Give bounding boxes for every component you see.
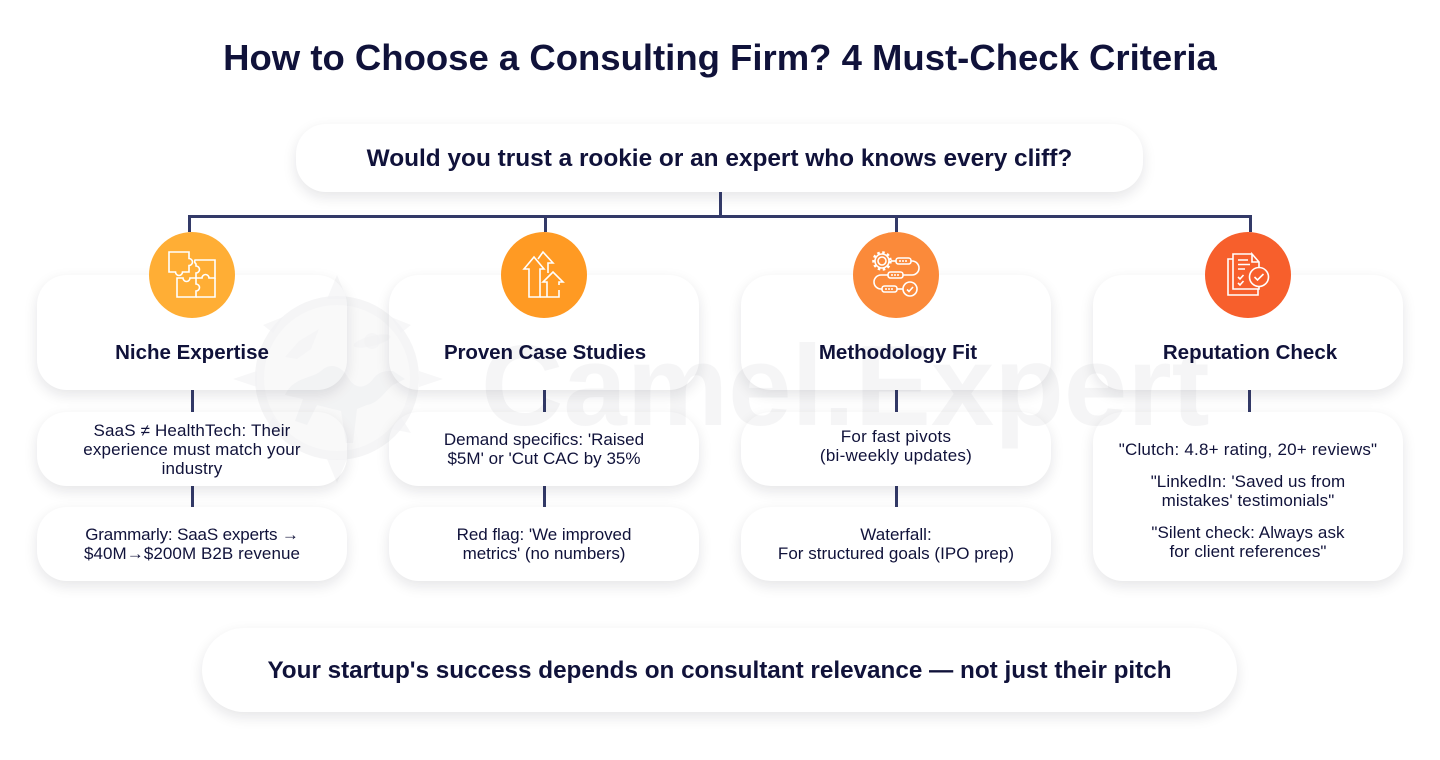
heading card: reputation check: Reputation Check xyxy=(1163,341,1337,364)
panel: reputation check xyxy=(1090,232,1406,590)
text card: industry match: SaaS ≠ HealthTech: Their xyxy=(94,420,290,440)
text card: agile: For fast pivots xyxy=(841,426,951,446)
panel: methodology fit xyxy=(738,232,1054,590)
heading card: reputation check xyxy=(1093,275,1403,390)
title: How to Choose a Consulting Firm? 4 Must-Check Criteria xyxy=(223,37,1217,78)
text card: demand specifics: Demand specifics: 'Raised xyxy=(444,430,644,449)
text card: review sources: mistakes' testimonials" "Silent check: Always ask xyxy=(1151,491,1345,542)
heading card: methodology fit: Methodology Fit xyxy=(819,341,977,364)
heading card: niche expertise: Niche Expertise xyxy=(115,341,269,364)
text card: Grammarly example: $40M→$200M B2B revenue xyxy=(84,544,300,563)
text card: Grammarly example: Grammarly: SaaS experts → xyxy=(85,525,299,544)
top question pill xyxy=(296,124,1143,192)
text card: demand specifics xyxy=(389,412,699,486)
icon: process flow xyxy=(853,232,939,318)
text card: industry match: industry xyxy=(162,458,222,478)
watermark: camel compass emblem xyxy=(255,296,419,460)
watermark: Camel.Expert wordmark: Camel.Expert xyxy=(481,323,1210,450)
text card: review sources: for client references" xyxy=(1169,542,1327,561)
heading card: proven case studies xyxy=(389,275,699,390)
icon: checklist document xyxy=(1205,232,1291,318)
connector: tree from question to four criteria xyxy=(188,192,1252,232)
heading card: niche expertise xyxy=(37,275,347,390)
text card: demand specifics: $5M' or 'Cut CAC by 35% xyxy=(447,449,641,468)
text card: waterfall xyxy=(741,507,1051,581)
text card: review sources xyxy=(1093,412,1403,581)
bottom conclusion pill xyxy=(202,628,1237,712)
text card: industry match xyxy=(37,412,347,486)
text card: waterfall: Waterfall: xyxy=(860,525,932,544)
top question pill: Would you trust a rookie or an expert who knows every cliff? xyxy=(367,145,1072,172)
icon: puzzle xyxy=(149,232,235,318)
text card: industry match: experience must match your xyxy=(83,440,301,458)
text card: red flag: Red flag: 'We improved xyxy=(457,525,631,544)
text card: agile xyxy=(741,412,1051,486)
text card: Grammarly example xyxy=(37,507,347,581)
text card: review sources: "Clutch: 4.8+ rating, 20+ reviews" "LinkedIn: 'Saved us from xyxy=(1119,440,1377,491)
heading card: proven case studies: Proven Case Studies xyxy=(444,341,646,364)
bottom conclusion pill: Your startup's success depends on consultant relevance — not just their pitch xyxy=(267,657,1172,684)
heading card: methodology fit xyxy=(741,275,1051,390)
text card: red flag: metrics' (no numbers) xyxy=(463,544,625,563)
icon: rising arrows xyxy=(501,232,587,318)
text card: red flag xyxy=(389,507,699,581)
panel: proven case studies xyxy=(386,232,702,590)
panel: niche expertise xyxy=(34,232,350,590)
text card: agile: (bi-weekly updates) xyxy=(820,446,972,464)
text card: waterfall: For structured goals (IPO prep) xyxy=(778,544,1014,563)
